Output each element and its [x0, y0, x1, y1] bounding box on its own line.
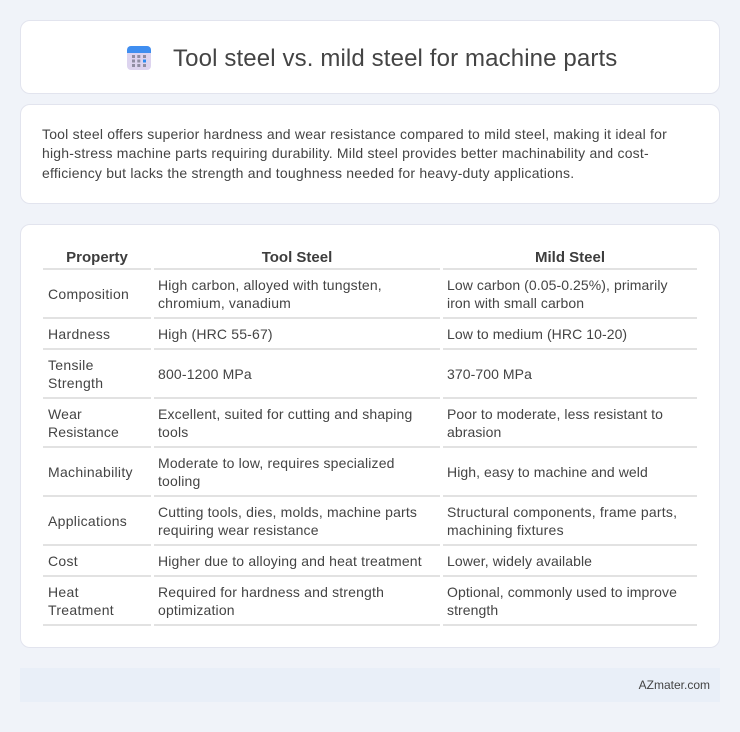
comparison table: Optional, commonly used to improve [447, 584, 677, 600]
comparison table: Required for hardness and strength [158, 584, 384, 600]
title: Tool steel vs. mild steel for machine parts [173, 45, 617, 72]
title card [20, 20, 720, 94]
intro text [42, 126, 667, 181]
comparison table: strength [447, 602, 498, 618]
comparison table: Heat [48, 584, 79, 600]
comparison table: Treatment [48, 602, 114, 618]
comparison table: Poor to moderate, less resistant to [447, 406, 663, 422]
comparison table: Composition [48, 286, 129, 302]
comparison table: Machinability [48, 464, 133, 480]
comparison table: High (HRC 55-67) [158, 326, 273, 342]
comparison table: Lower, widely available [447, 553, 592, 569]
row: heat treatment [48, 584, 677, 618]
comparison table: Low to medium (HRC 10-20) [447, 326, 627, 342]
comparison table: Strength [48, 375, 103, 391]
comparison table: iron with small carbon [447, 295, 584, 311]
comparison table: Wear [48, 406, 82, 422]
row: tensile strength [48, 357, 532, 391]
comparison table: Cost [48, 553, 78, 569]
comparison table: High, easy to machine and weld [447, 464, 648, 480]
comparison table: Low carbon (0.05-0.25%), primarily [447, 277, 668, 293]
row: applications [48, 504, 677, 538]
comparison table: 800-1200 MPa [158, 366, 252, 382]
icon: calendar [127, 46, 151, 70]
comparison table: Moderate to low, requires specialized [158, 455, 395, 471]
comparison table: Higher due to alloying and heat treatment [158, 553, 422, 569]
footer credit: AZmater.com [639, 678, 710, 692]
intro text: Tool steel offers superior hardness and wear resistance compared to mild steel, making it ideal for [42, 126, 667, 142]
comparison table: tools [158, 424, 188, 440]
row: cost [48, 553, 592, 569]
row: composition [48, 277, 668, 311]
intro text: high-stress machine parts requiring durability. Mild steel provides better machinability and cost- [42, 145, 649, 161]
comparison table: machining fixtures [447, 522, 564, 538]
comparison table: Hardness [48, 326, 110, 342]
header: mild steel: Mild Steel [535, 249, 605, 266]
comparison table: Excellent, suited for cutting and shaping [158, 406, 412, 422]
comparison table: High carbon, alloyed with tungsten, [158, 277, 382, 293]
comparison table: Applications [48, 513, 127, 529]
comparison table: chromium, vanadium [158, 295, 291, 311]
comparison table: Resistance [48, 424, 119, 440]
comparison table: Structural components, frame parts, [447, 504, 677, 520]
comparison table: optimization [158, 602, 235, 618]
row: hardness [48, 326, 627, 342]
intro text: efficiency but lacks the strength and toughness needed for heavy-duty applications. [42, 165, 574, 181]
header: property: Property [66, 249, 128, 266]
comparison table: abrasion [447, 424, 501, 440]
comparison table: Tensile [48, 357, 94, 373]
header: tool steel: Tool Steel [262, 249, 332, 266]
comparison table: 370-700 MPa [447, 366, 532, 382]
comparison table: Cutting tools, dies, molds, machine parts [158, 504, 417, 520]
footer bar [20, 668, 720, 702]
table card [20, 224, 720, 648]
comparison table: requiring wear resistance [158, 522, 319, 538]
intro card [20, 104, 720, 204]
comparison table: tooling [158, 473, 200, 489]
row: machinability [48, 455, 648, 489]
row: wear resistance [48, 406, 663, 440]
